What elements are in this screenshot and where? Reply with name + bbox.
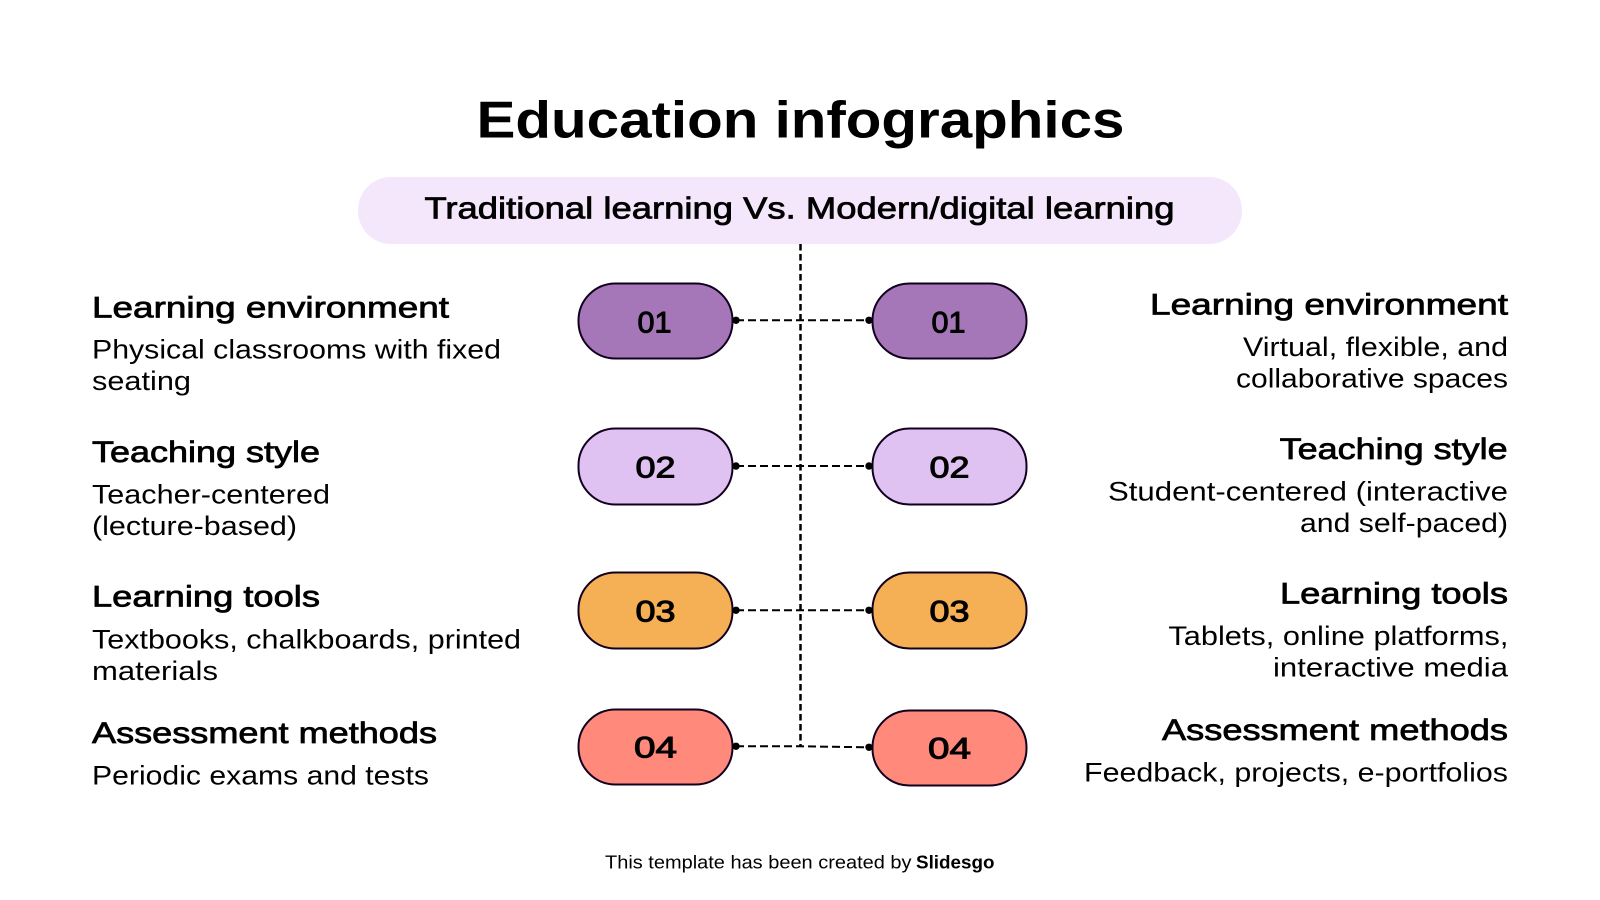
row 3 left: traditional learning tools: Learning tools: [92, 581, 320, 614]
row 2 left: traditional teaching style: (lecture-based): [92, 511, 297, 541]
right badge 04: [865, 710, 1026, 786]
row 1 right: modern learning environment: Learning environment: [1150, 288, 1509, 321]
left badge 03: 03: [636, 596, 676, 629]
right badge 01: [865, 284, 1026, 358]
row 3 right: modern learning tools: Tablets, online platforms,: [1168, 621, 1508, 651]
row 2 left: traditional teaching style: [92, 436, 330, 541]
row 4 left: traditional assessment methods: Periodic exams and tests: [92, 760, 429, 790]
row 2 left: traditional teaching style: Teaching style: [92, 436, 320, 469]
row 1 left: traditional learning environment: seating: [92, 366, 191, 396]
row 4 left: traditional assessment methods: [92, 717, 437, 790]
row 4 right: modern assessment methods: Feedback, projects, e-portfolios: [1084, 758, 1508, 788]
row 2 right: modern teaching style: Student-centered (interactive: [1108, 476, 1508, 506]
footer credit: Slidesgo: [916, 852, 995, 872]
right badge 03: 03: [930, 596, 970, 629]
row 2 right: modern teaching style: and self-paced): [1300, 508, 1508, 538]
left badge 04: [578, 710, 740, 784]
row 1 left: traditional learning environment: [92, 291, 501, 396]
row 3 right: modern learning tools: [1168, 577, 1508, 683]
row 3 right: modern learning tools: Learning tools: [1280, 577, 1508, 610]
row 3 left: traditional learning tools: [92, 581, 521, 686]
row 2 right: modern teaching style: Teaching style: [1280, 433, 1508, 466]
right badge 03: [865, 572, 1026, 648]
left badge 02: 02: [636, 451, 676, 484]
row 1 right: modern learning environment: collaborative spaces: [1236, 363, 1508, 393]
right badge 01: 01: [932, 306, 966, 339]
row 1 left: traditional learning environment: Physical classrooms with fixed: [92, 334, 501, 364]
left badge 01: [578, 284, 740, 358]
left badge 01: 01: [638, 306, 672, 339]
row 4 right: modern assessment methods: [1084, 714, 1508, 788]
subtitle banner: [358, 177, 1242, 244]
dashed connector tree: [736, 244, 869, 747]
left badge 02: [578, 428, 740, 504]
left badge 03: [578, 572, 740, 648]
row 3 right: modern learning tools: interactive media: [1273, 653, 1508, 683]
row 4 right: modern assessment methods: Assessment methods: [1162, 714, 1508, 747]
footer credit: This template has been created by: [605, 852, 912, 872]
row 1 left: traditional learning environment: Learning environment: [92, 291, 450, 324]
row 3 left: traditional learning tools: materials: [92, 656, 218, 686]
title: Education infographics: [476, 92, 1124, 150]
row 1 right: modern learning environment: [1150, 288, 1509, 393]
subtitle banner: Traditional learning Vs. Modern/digital learning: [424, 190, 1174, 226]
row 2 right: modern teaching style: [1108, 433, 1508, 538]
right badge 02: 02: [930, 451, 970, 484]
row 3 left: traditional learning tools: Textbooks, chalkboards, printed: [92, 624, 521, 654]
row 2 left: traditional teaching style: Teacher-centered: [92, 479, 330, 509]
right badge 02: [865, 428, 1026, 504]
left badge 04: 04: [634, 731, 677, 764]
row 4 left: traditional assessment methods: Assessment methods: [92, 717, 437, 750]
row 1 right: modern learning environment: Virtual, flexible, and: [1243, 332, 1508, 362]
right badge 04: 04: [928, 732, 971, 765]
